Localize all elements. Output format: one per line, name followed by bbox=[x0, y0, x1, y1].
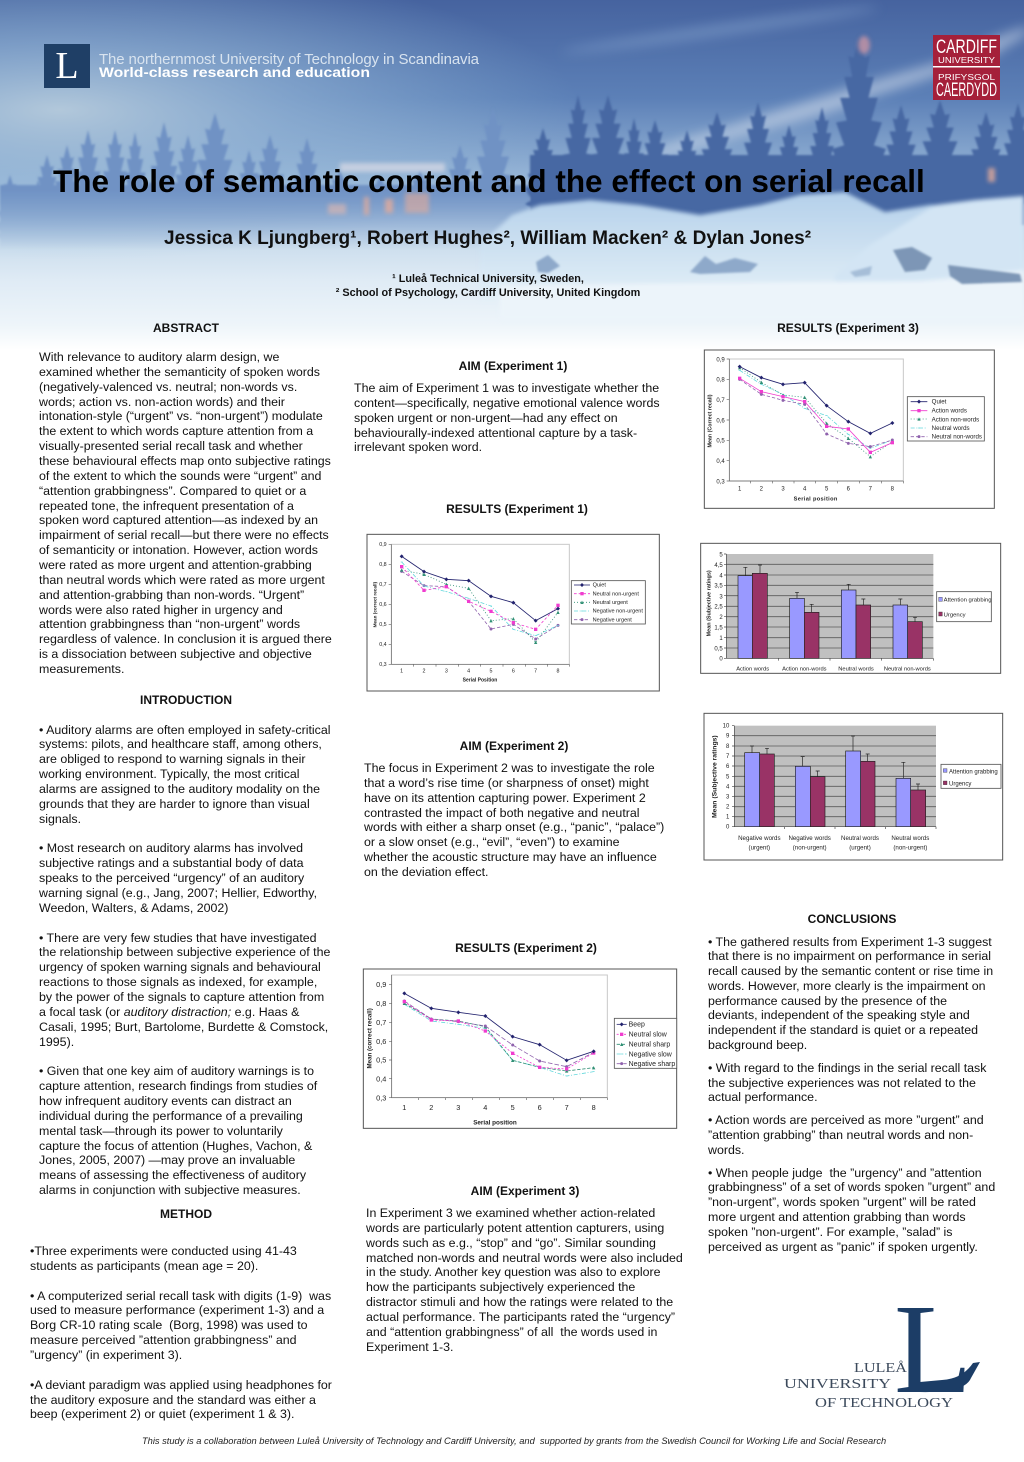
text: conclusions: • The gathered results from Experiment 1-3 suggest bbox=[708, 934, 992, 948]
line chart: experiment 3: 1 bbox=[738, 487, 742, 493]
bar chart: experiment 3 subjective ratings: Neutral words bbox=[838, 667, 874, 673]
heading: conclusions: CONCLUSIONS bbox=[808, 912, 896, 926]
text: introduction: a focal task (or auditory distraction; e.g. Haas & bbox=[39, 1005, 299, 1019]
bar chart: experiment 2 subjective ratings: 5 bbox=[726, 774, 730, 780]
line chart: experiment 2: Negative sharp bbox=[629, 1061, 675, 1068]
bar chart: experiment 3 subjective ratings: 5 bbox=[719, 552, 723, 558]
line chart: experiment 2: 5 bbox=[511, 1103, 515, 1112]
bar chart: experiment 2 subjective ratings: 6 bbox=[726, 764, 730, 770]
bar chart: experiment 2 subjective ratings: Urgency bbox=[949, 781, 971, 787]
text: aim experiment 3: distractor stimuli and how the ratings were related to the bbox=[366, 1295, 673, 1309]
text: conclusions: grabbingness” of a set of words spoken ”urgent” and bbox=[708, 1180, 995, 1194]
bar chart: experiment 2 subjective ratings: 0 bbox=[726, 825, 730, 831]
line chart: experiment 1: 0,8 bbox=[379, 562, 387, 568]
text: abstract: the extent to which words capture attention from a bbox=[39, 424, 313, 438]
line chart: experiment 1: 4 bbox=[467, 669, 470, 675]
text: introduction: individual during the performance of a prevailing bbox=[39, 1109, 303, 1123]
line chart: experiment 2: 0,9 bbox=[376, 980, 386, 989]
line chart: experiment 3: 0,7 bbox=[716, 398, 725, 404]
text: aim experiment 1: irrelevant spoken word. bbox=[354, 440, 482, 454]
bar chart: experiment 3 subjective ratings: Urgency bbox=[944, 612, 966, 618]
bar chart: experiment 2 subjective ratings: Negative words bbox=[788, 835, 831, 842]
bar chart: experiment 3 subjective ratings: 3 bbox=[719, 594, 723, 600]
bar chart: experiment 2 subjective ratings: 8 bbox=[726, 744, 730, 750]
text: conclusions: • Action words are perceived as more ”urgent” and bbox=[708, 1113, 984, 1127]
line chart: experiment 1: 6 bbox=[512, 669, 515, 675]
text: introduction: means of assessing the effectiveness of auditory bbox=[39, 1168, 306, 1182]
text: abstract: impairment of serial recall—but there were no effects bbox=[39, 528, 329, 542]
text: method: ”urgency” (in experiment 3). bbox=[30, 1348, 182, 1362]
text: introduction: Weedon, Walters, & Adams, 2002) bbox=[39, 901, 228, 915]
text: abstract: attention grabbingness than “non-urgent” words bbox=[39, 617, 300, 631]
line chart: experiment 3: 6 bbox=[847, 487, 851, 493]
affiliations: ¹ Luleå Technical University, Sweden, bbox=[392, 273, 584, 285]
text: introduction: the relationship between subjective experience of the bbox=[39, 945, 330, 959]
bar chart: experiment 3 subjective ratings: 0,5 bbox=[714, 646, 723, 652]
text: abstract: words; action vs. non-action words) and their bbox=[39, 395, 285, 409]
bar chart: experiment 2 subjective ratings: Mean (Subjective ratings) bbox=[712, 735, 719, 818]
line chart: experiment 3: 4 bbox=[803, 487, 807, 493]
text: aim experiment 2: words with either a sharp onset (e.g., “panic”, “palace”) bbox=[364, 820, 664, 834]
text: introduction: subjective ratings and a substantial body of data bbox=[39, 856, 304, 870]
line chart: experiment 3: Action non-words bbox=[932, 416, 979, 423]
logo: Luleå L square: L bbox=[55, 45, 79, 87]
text: introduction: reactions to those signals as indexed, for example, bbox=[39, 975, 317, 989]
text: aim experiment 2: or a slow onset (e.g., “evil”, “even”) to examine bbox=[364, 835, 619, 849]
bar chart: experiment 3 subjective ratings: Mean (Subjective ratings) bbox=[706, 570, 712, 636]
text: introduction: by the power of the signals to capture attention from bbox=[39, 990, 324, 1004]
heading: aim experiment 2: AIM (Experiment 2) bbox=[460, 739, 568, 753]
text: aim experiment 3: matched non-words and neutral words were also included bbox=[366, 1251, 683, 1265]
bar chart: experiment 3 subjective ratings: 2 bbox=[719, 615, 723, 621]
text: aim experiment 1: The aim of Experiment 1 was to investigate whether the bbox=[354, 381, 659, 395]
bar chart: experiment 2 subjective ratings: 3 bbox=[726, 794, 730, 800]
text: introduction: • There are very few studies that have investigated bbox=[39, 931, 317, 945]
line chart: experiment 1: 7 bbox=[534, 669, 537, 675]
bar chart: experiment 2 subjective ratings: Attention grabbing bbox=[949, 769, 998, 775]
text: aim experiment 3: words are particularly potent attention capturers, using bbox=[366, 1221, 664, 1235]
line chart: experiment 2: 6 bbox=[538, 1103, 542, 1112]
bar chart: experiment 2 subjective ratings: Negative words bbox=[738, 835, 781, 842]
text: conclusions: • When people judge the ”urgency” and ”attention bbox=[708, 1166, 982, 1180]
bar chart: experiment 3 subjective ratings: 4,5 bbox=[714, 563, 723, 569]
line chart: experiment 3: 2 bbox=[760, 487, 764, 493]
line chart: experiment 2: 0,7 bbox=[376, 1018, 386, 1027]
text: method: students as participants (mean age = 20). bbox=[30, 1259, 258, 1273]
line chart: experiment 3: 7 bbox=[869, 487, 873, 493]
text: aim experiment 3: words such as e.g., “stop” and “go”. Similar sounding bbox=[366, 1236, 656, 1250]
line chart: experiment 2: 2 bbox=[429, 1103, 433, 1112]
bar chart: experiment 2 subjective ratings: 7 bbox=[726, 754, 730, 760]
text: conclusions: actual performance. bbox=[708, 1090, 818, 1104]
bar chart: experiment 2 subjective ratings: (urgent) bbox=[849, 845, 871, 852]
text: conclusions bbox=[708, 934, 995, 1254]
text: introduction: alarms in conjunction with subjective measures. bbox=[39, 1183, 301, 1197]
line chart: experiment 2: 7 bbox=[565, 1103, 569, 1112]
bar chart: experiment 3 subjective ratings: 1,5 bbox=[714, 626, 723, 632]
text: abstract: “attention grabbingness”. Compared to quiet or a bbox=[39, 484, 306, 498]
line chart: experiment 3: Serial position bbox=[794, 497, 838, 503]
text: introduction: capture attention, research findings from studies of bbox=[39, 1079, 317, 1093]
text: aim experiment 2: on the deviation effect. bbox=[364, 865, 488, 879]
text: aim experiment 2: whether the acoustic structure may have an influence bbox=[364, 850, 657, 864]
text: introduction: 1995). bbox=[39, 1035, 74, 1049]
text: abstract: of the extent to which the sounds were “urgent” and bbox=[39, 469, 321, 483]
line chart: experiment 1: Negative urgent bbox=[593, 617, 632, 623]
line chart: experiment 3 bbox=[704, 350, 995, 509]
header tagline: World-class research and education bbox=[99, 66, 370, 81]
text: introduction: Casali, 1995; Burt, Bartolome, Burdette & Comstock, bbox=[39, 1020, 328, 1034]
line chart: experiment 2: 8 bbox=[592, 1103, 596, 1112]
text: introduction: urgency of spoken warning signals and behavioural bbox=[39, 960, 321, 974]
heading: introduction: INTRODUCTION bbox=[140, 693, 232, 707]
text: method: measure perceived ”attention grabbingness” and bbox=[30, 1333, 297, 1347]
line chart: experiment 2: Neutral slow bbox=[629, 1032, 668, 1039]
line chart: experiment 1: Serial Position bbox=[463, 678, 497, 684]
text: aim experiment 3: and “attention grabbingness” of all the words used in bbox=[366, 1325, 657, 1339]
bar chart: experiment 3 subjective ratings: Attention grabbing bbox=[944, 598, 991, 604]
text: introduction: • Given that one key aim of auditory warnings is to bbox=[39, 1064, 314, 1078]
text: introduction: speaks to the perceived “urgency” of an auditory bbox=[39, 871, 304, 885]
text: introduction: are obliged to respond to warning signals in their bbox=[39, 752, 306, 766]
heading: results experiment 3: RESULTS (Experiment 3) bbox=[777, 321, 919, 335]
text: conclusions: performance caused by the presence of the bbox=[708, 994, 947, 1008]
line chart: experiment 3: 0,3 bbox=[716, 479, 725, 485]
text: introduction: signals. bbox=[39, 812, 81, 826]
text: aim experiment 1: content—specifically, negative emotional valence words bbox=[354, 396, 660, 410]
line chart: experiment 3: 0,8 bbox=[716, 378, 725, 384]
line chart: experiment 3: 3 bbox=[781, 487, 785, 493]
text: introduction: how infrequent auditory events can distract an bbox=[39, 1094, 292, 1108]
background: winter forest photo bbox=[0, 0, 1024, 338]
bar chart: experiment 3 subjective ratings: 3,5 bbox=[714, 584, 723, 590]
text: introduction: grounds that they are harder to ignore than visual bbox=[39, 797, 310, 811]
line chart: experiment 3: 0,6 bbox=[716, 418, 725, 424]
text: aim experiment 3 bbox=[366, 1206, 683, 1354]
text: aim experiment 3: in the study. Another key question was also to explore bbox=[366, 1265, 661, 1279]
text: abstract: measurements. bbox=[39, 662, 124, 676]
text: introduction: capture the focus of attention (Hughes, Vachon, & bbox=[39, 1139, 312, 1153]
logo: Cardiff University: UNIVERSITY bbox=[938, 56, 996, 65]
text: introduction: systems: pilots, and healthcare staff, among others, bbox=[39, 737, 322, 751]
line chart: experiment 1: 0,3 bbox=[379, 662, 387, 668]
line chart: experiment 3: 0,5 bbox=[716, 439, 725, 445]
line chart: experiment 1: Neutral urgent bbox=[593, 600, 628, 606]
line chart: experiment 2: 0,8 bbox=[376, 999, 386, 1008]
text: aim experiment 2: contrasted the impact of both negative and neutral bbox=[364, 806, 640, 820]
text: abstract: visually-presented serial recall task and whether bbox=[39, 439, 303, 453]
bar chart: experiment 3 subjective ratings: Action non-words bbox=[782, 667, 827, 673]
text: abstract: With relevance to auditory alarm design, we bbox=[39, 350, 279, 364]
line chart: experiment 3: 5 bbox=[825, 487, 829, 493]
line chart: experiment 1: 0,9 bbox=[379, 542, 387, 548]
text: conclusions: more urgent and attention grabbing than words bbox=[708, 1210, 966, 1224]
heading: aim experiment 1: AIM (Experiment 1) bbox=[459, 359, 567, 373]
line chart: experiment 1: 8 bbox=[557, 669, 560, 675]
text: abstract: of semanticity or intonation. However, action words bbox=[39, 543, 318, 557]
line chart: experiment 2: 0,3 bbox=[376, 1093, 386, 1102]
header tagline bbox=[99, 51, 479, 81]
text: method: •Three experiments were conducted using 41-43 bbox=[30, 1244, 297, 1258]
bar chart: experiment 3 subjective ratings: Neutral non-words bbox=[884, 667, 931, 673]
logo: Luleå L square bbox=[44, 44, 90, 88]
bar chart: experiment 3 subjective ratings: 4 bbox=[719, 573, 723, 579]
logo: Luleå University of Technology: LULEÅ bbox=[854, 1360, 907, 1375]
bar chart: experiment 3 subjective ratings: 1 bbox=[719, 636, 723, 642]
heading: aim experiment 3: AIM (Experiment 3) bbox=[471, 1184, 579, 1198]
title: The role of semantic content and the effect on serial recall bbox=[53, 163, 925, 199]
text: abstract: were rated as more urgent and attention-grabbing bbox=[39, 558, 312, 572]
footer note: This study is a collaboration between Luleå University of Technology and Cardiff University, and supported by grants from the Swedish Council for Working Life and Social Research bbox=[142, 1436, 886, 1446]
header tagline: The northernmost University of Technology in Scandinavia bbox=[99, 51, 479, 68]
logo: Luleå University of Technology: OF TECHNOLOGY bbox=[815, 1395, 953, 1410]
text: aim experiment 3: In Experiment 3 we examined whether action-related bbox=[366, 1206, 655, 1220]
line chart: experiment 2: Neutral sharp bbox=[629, 1042, 670, 1049]
text: aim experiment 3: actual performance. The participants rated the “urgency” bbox=[366, 1310, 675, 1324]
bar chart: experiment 2 subjective ratings: (urgent) bbox=[749, 845, 770, 852]
text: aim experiment 2: have on its attention capturing power. Experiment 2 bbox=[364, 791, 646, 805]
text: conclusions: deviants, independent of the speaking style and bbox=[708, 1008, 970, 1022]
bar chart: experiment 3 subjective ratings: 2,5 bbox=[714, 605, 723, 611]
text: conclusions: the subjective experiences was not related to the bbox=[708, 1076, 976, 1090]
authors: Jessica K Ljungberg¹, Robert Hughes², William Macken² & Dylan Jones² bbox=[164, 228, 811, 249]
bar chart: experiment 3 subjective ratings: Action words bbox=[736, 667, 769, 673]
line chart: experiment 2: 3 bbox=[456, 1103, 460, 1112]
line chart: experiment 2: 0,6 bbox=[376, 1037, 386, 1046]
line chart: experiment 2: Serial position bbox=[473, 1120, 517, 1127]
line chart: experiment 1: Negative non-urgent bbox=[593, 609, 643, 615]
text: method: beep (experiment 2) or quiet (experiment 1 & 3). bbox=[30, 1407, 294, 1421]
text: aim experiment 3: how the participants subjectively experienced the bbox=[366, 1280, 635, 1294]
text: abstract: (negatively-valenced vs. neutral; non-words vs. bbox=[39, 380, 297, 394]
text: abstract: spoken word captured attention—as indexed by an bbox=[39, 513, 318, 527]
heading: results experiment 1: RESULTS (Experiment 1) bbox=[446, 502, 588, 516]
line chart: experiment 1: 2 bbox=[423, 669, 426, 675]
heading: method: METHOD bbox=[160, 1207, 212, 1221]
affiliations: ² School of Psychology, Cardiff University, United Kingdom bbox=[336, 287, 640, 299]
text: method bbox=[30, 1244, 332, 1421]
line chart: experiment 1: 1 bbox=[400, 669, 403, 675]
text: aim experiment 2: that a word’s rise time (or sharpness of onset) might bbox=[364, 776, 649, 790]
text: introduction: alarms are assigned to the auditory modality on the bbox=[39, 782, 320, 796]
text: conclusions: words. bbox=[708, 1143, 744, 1157]
text: introduction: Jones, 2005, 2007) —may prove an invaluable bbox=[39, 1153, 295, 1167]
line chart: experiment 1 bbox=[366, 534, 660, 692]
line chart: experiment 2: Mean (correct recall) bbox=[366, 1008, 373, 1068]
line chart: experiment 1: 0,4 bbox=[379, 642, 387, 648]
logo: Luleå University of Technology bbox=[784, 1300, 980, 1420]
line chart: experiment 1: Quiet bbox=[593, 583, 606, 589]
line chart: experiment 1: 5 bbox=[490, 669, 493, 675]
bar chart: experiment 3 subjective ratings bbox=[700, 542, 1002, 674]
line chart: experiment 2: 1 bbox=[402, 1103, 406, 1112]
text: introduction: mental task—through its power to voluntarily bbox=[39, 1124, 283, 1138]
text: abstract: words were also rated higher in urgency and bbox=[39, 603, 283, 617]
text: conclusions: background beep. bbox=[708, 1038, 807, 1052]
logo: Luleå University of Technology: UNIVERSITY bbox=[784, 1376, 891, 1391]
text: method: •A deviant paradigm was applied using headphones for bbox=[30, 1378, 332, 1392]
bar chart: experiment 2 subjective ratings: 2 bbox=[726, 805, 730, 811]
text: abstract bbox=[39, 350, 332, 676]
text: method: used to measure performance (experiment 1-3) and a bbox=[30, 1303, 324, 1317]
logo: Cardiff University bbox=[933, 35, 1000, 100]
text: conclusions: words. However, more clearly is the impairment on bbox=[708, 979, 986, 993]
line chart: experiment 2: Beep bbox=[629, 1022, 645, 1029]
line chart: experiment 3: Neutral non-words bbox=[932, 434, 982, 441]
bar chart: experiment 3 subjective ratings: 0 bbox=[719, 657, 723, 663]
text: aim experiment 3: Experiment 1-3. bbox=[366, 1340, 453, 1354]
line chart: experiment 3: 8 bbox=[891, 487, 895, 493]
line chart: experiment 3: Mean (Correct recall) bbox=[707, 394, 713, 448]
text: conclusions: recall caused by the semantic content or rise time in bbox=[708, 964, 993, 978]
bar chart: experiment 2 subjective ratings: 9 bbox=[726, 734, 730, 740]
text: introduction: working environment. Typically, the most critical bbox=[39, 767, 300, 781]
text: introduction: • Auditory alarms are often employed in safety-critical bbox=[39, 722, 331, 736]
line chart: experiment 3: Action words bbox=[932, 408, 967, 415]
bar chart: experiment 2 subjective ratings bbox=[704, 712, 1004, 860]
text: aim experiment 1: behaviourally-indexed attentional capture by a task- bbox=[354, 426, 637, 440]
line chart: experiment 1: 0,6 bbox=[379, 602, 387, 608]
text: method: the auditory exposure and the standard was either a bbox=[30, 1393, 316, 1407]
text: abstract: and attention-grabbing than non-words. “Urgent” bbox=[39, 588, 304, 602]
text: aim experiment 2 bbox=[364, 761, 664, 879]
text: introduction bbox=[39, 722, 331, 1197]
text: method: Borg CR-10 rating scale (Borg, 1998) was used to bbox=[30, 1318, 308, 1332]
line chart: experiment 3: Neutral words bbox=[932, 425, 970, 432]
bar chart: experiment 2 subjective ratings: 1 bbox=[726, 815, 730, 821]
bar chart: experiment 2 subjective ratings: 4 bbox=[726, 784, 730, 790]
bar chart: experiment 2 subjective ratings: Neutral words bbox=[891, 835, 929, 842]
bar chart: experiment 2 subjective ratings: (non-urgent) bbox=[793, 845, 827, 852]
line chart: experiment 1: 3 bbox=[445, 669, 448, 675]
text: aim experiment 2: The focus in Experiment 2 was to investigate the role bbox=[364, 761, 655, 775]
text: conclusions: that there is no impairment on performance in serial bbox=[708, 949, 991, 963]
line chart: experiment 2: 0,4 bbox=[376, 1074, 386, 1083]
text: abstract: examined whether the semanticity of spoken words bbox=[39, 365, 320, 379]
line chart: experiment 3: 0,9 bbox=[716, 357, 725, 363]
text: abstract: these behavioural effects map onto subjective ratings bbox=[39, 454, 331, 468]
text: abstract: intonation-style (“urgent” vs. “non-urgent”) modulate bbox=[39, 409, 323, 423]
bar chart: experiment 2 subjective ratings: (non-urgent) bbox=[893, 845, 927, 852]
line chart: experiment 2: 4 bbox=[483, 1103, 487, 1112]
logo: Cardiff University: PRIFYSGOL bbox=[938, 73, 996, 82]
text: abstract: regardless of valence. In conclusion it is argued there bbox=[39, 632, 332, 646]
line chart: experiment 2 bbox=[362, 968, 678, 1129]
text: abstract: than neutral words which were rated as more urgent bbox=[39, 573, 325, 587]
line chart: experiment 1: 0,5 bbox=[379, 622, 387, 628]
line chart: experiment 2: Negative slow bbox=[629, 1051, 673, 1058]
text: conclusions: perceived as urgent as ”panic” if spoken urgently. bbox=[708, 1240, 978, 1254]
line chart: experiment 1: Neutral non-urgent bbox=[593, 591, 639, 597]
text: conclusions: • With regard to the findings in the serial recall task bbox=[708, 1061, 986, 1075]
text: method: • A computerized serial recall task with digits (1-9) was bbox=[30, 1289, 331, 1303]
text: conclusions: ”attention grabbing” than neutral words and non- bbox=[708, 1128, 973, 1142]
line chart: experiment 3: 0,4 bbox=[716, 459, 725, 465]
line chart: experiment 1: Mean (correct recall) bbox=[373, 581, 378, 627]
heading: results experiment 2: RESULTS (Experiment 2) bbox=[455, 941, 597, 955]
text: aim experiment 1 bbox=[354, 381, 660, 454]
text: introduction: warning signal (e.g., Jang, 2007; Hellier, Edworthy, bbox=[39, 886, 317, 900]
bar chart: experiment 2 subjective ratings: Neutral words bbox=[841, 835, 879, 842]
text: conclusions: independent if the standard is quiet or a repeated bbox=[708, 1023, 978, 1037]
heading: abstract: ABSTRACT bbox=[153, 321, 219, 335]
text: conclusions: ”non-urgent”, words spoken ”urgent” will be rated bbox=[708, 1195, 976, 1209]
text: aim experiment 1: spoken urgent or non-urgent—had any effect on bbox=[354, 411, 618, 425]
bar chart: experiment 2 subjective ratings: 10 bbox=[723, 724, 730, 730]
text: abstract: is a dissociation between subjective and objective bbox=[39, 647, 312, 661]
line chart: experiment 3: Quiet bbox=[932, 399, 947, 406]
text: abstract: repeated tone, the infrequent presentation of a bbox=[39, 499, 294, 513]
line chart: experiment 2: 0,5 bbox=[376, 1056, 386, 1065]
text: introduction: • Most research on auditory alarms has involved bbox=[39, 841, 303, 855]
line chart: experiment 1: 0,7 bbox=[379, 582, 387, 588]
affiliations bbox=[336, 273, 640, 299]
text: conclusions: spoken ”non-urgent”. For example, ”salad” is bbox=[708, 1225, 952, 1239]
